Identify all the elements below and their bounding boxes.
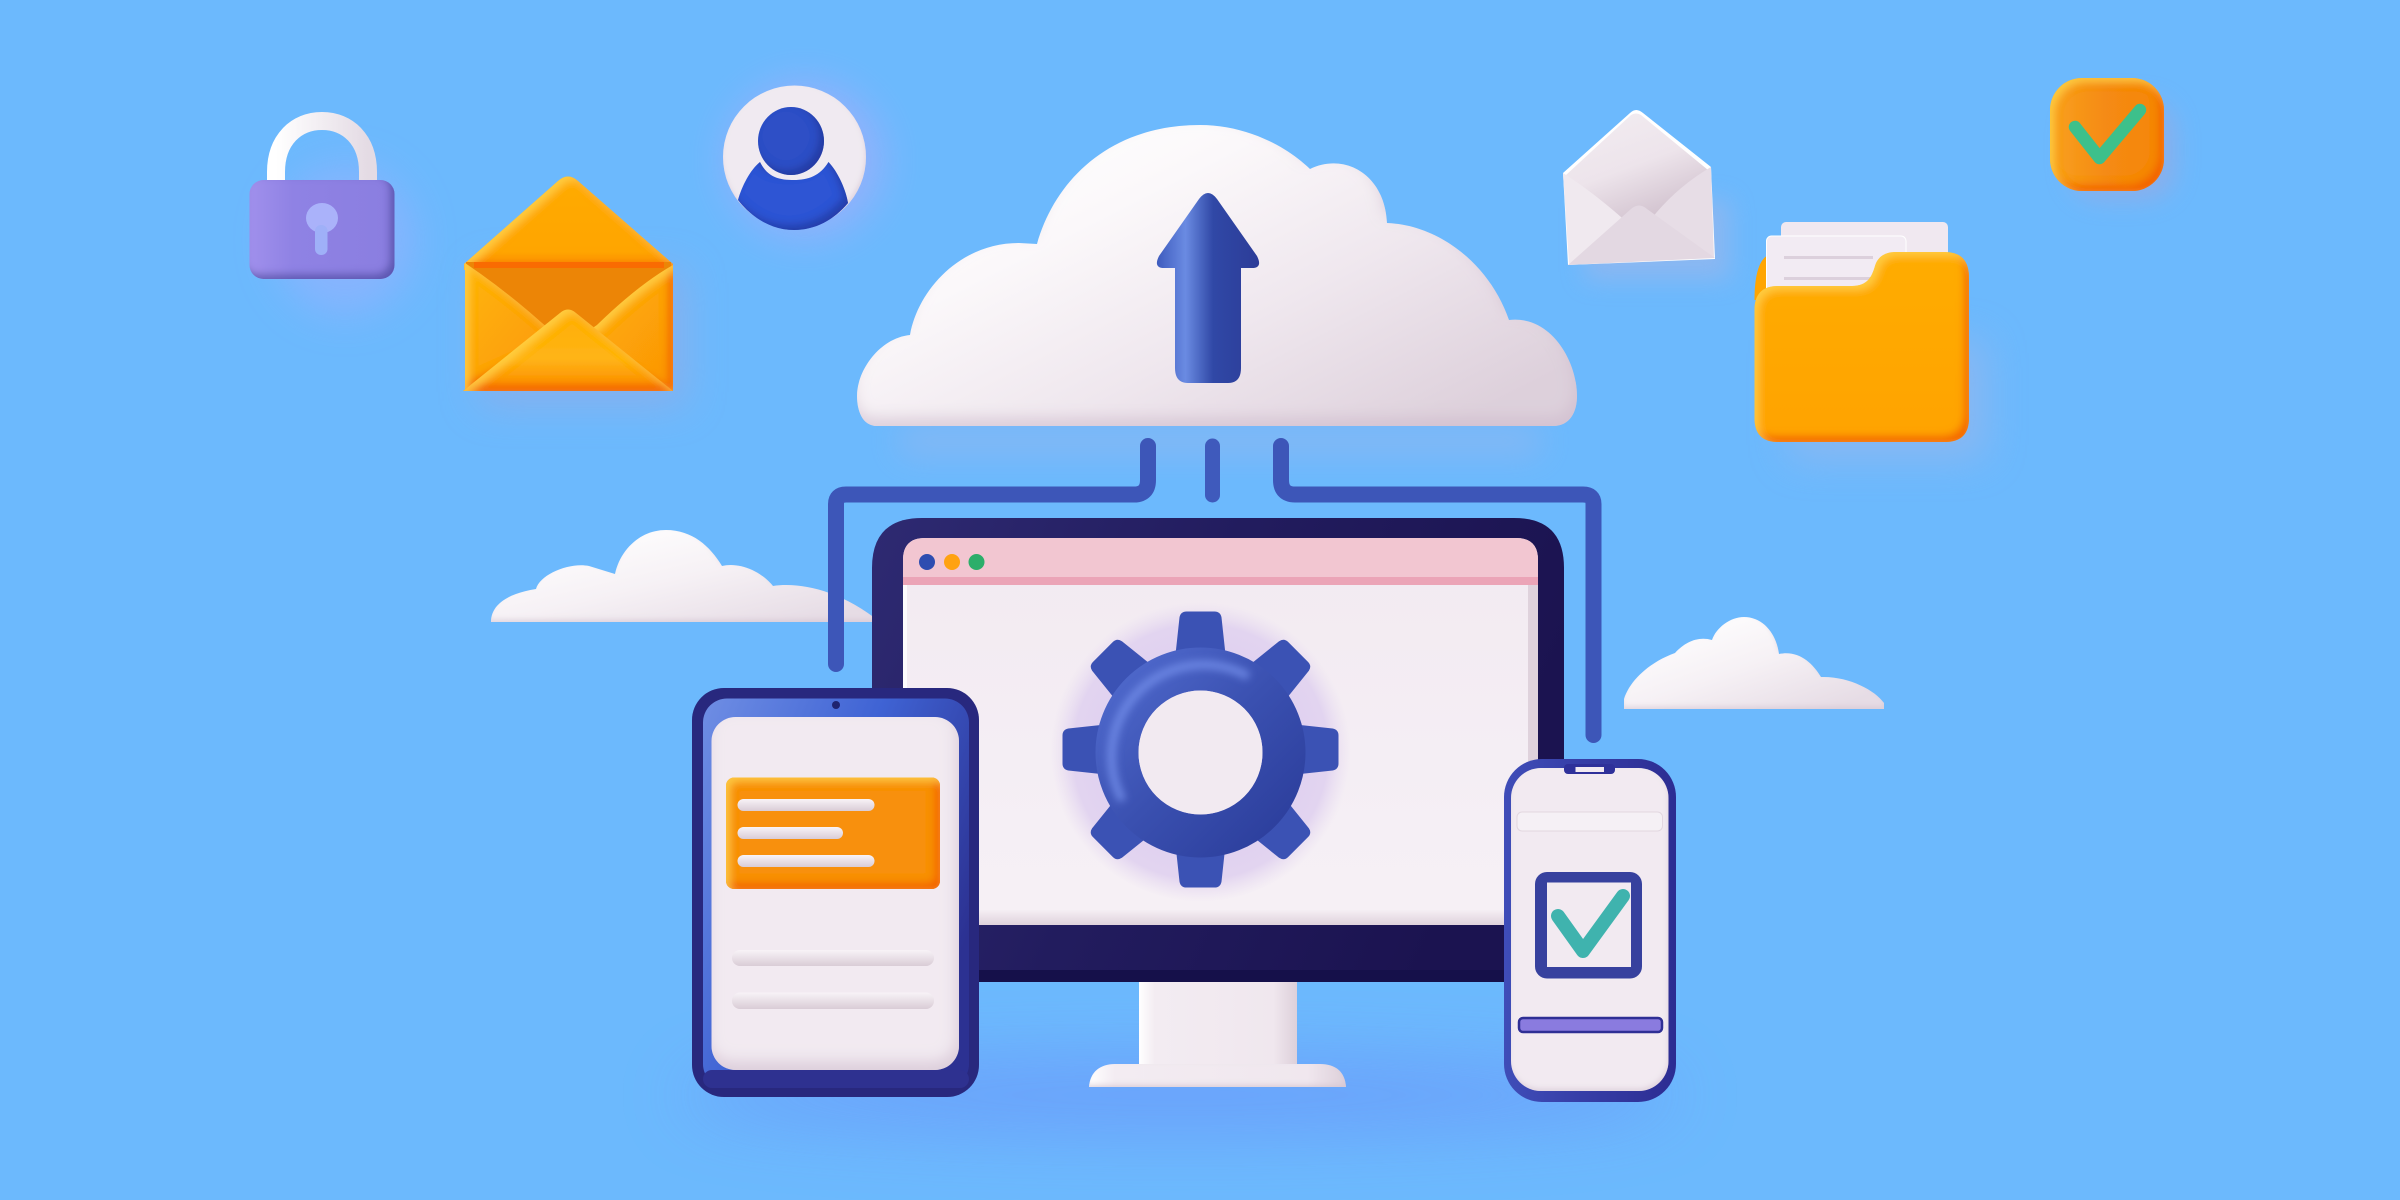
check mark teal [1558, 896, 1623, 951]
folder icon [1754, 222, 1985, 458]
user avatar icon [723, 82, 883, 238]
tablet frame [692, 688, 979, 1097]
folder front [1754, 252, 1969, 442]
tablet camera [832, 701, 840, 709]
browser window [903, 538, 1538, 925]
upload arrow [1157, 193, 1259, 383]
monitor frame [872, 518, 1564, 982]
window dots [919, 554, 984, 570]
check badge icon [2050, 78, 2175, 200]
monitor stand [1139, 975, 1297, 1067]
folder back [1754, 254, 1770, 300]
purple bar [1519, 1018, 1662, 1032]
tablet grey bars [732, 950, 934, 1009]
paper front [1766, 236, 1906, 296]
orange card [726, 778, 940, 889]
padlock icon [250, 121, 415, 315]
connector right [1281, 446, 1595, 735]
connector left [836, 446, 1148, 664]
tablet screen [712, 717, 959, 1070]
phone frame [1504, 759, 1676, 1102]
gear icon [1064, 612, 1338, 886]
paper back [1781, 222, 1948, 282]
big white cloud [857, 125, 1577, 456]
phone notch [1564, 764, 1615, 774]
small cloud left [491, 530, 880, 622]
small cloud right [1624, 617, 1884, 709]
orange envelope icon [463, 176, 685, 405]
checkbox [1535, 872, 1642, 978]
floor glow [680, 1057, 1680, 1133]
smartphone [1504, 759, 1676, 1102]
connector lines [836, 446, 1595, 735]
phone top bar [1517, 812, 1662, 831]
monitor [872, 518, 1564, 1087]
connector middle [1205, 446, 1220, 495]
white envelope icon [1563, 110, 1730, 280]
gear glow [1050, 602, 1350, 902]
check mark green [2075, 110, 2140, 158]
tablet [692, 688, 979, 1097]
browser title bar [903, 538, 1538, 585]
card text lines [738, 799, 874, 867]
phone screen [1511, 768, 1668, 1091]
